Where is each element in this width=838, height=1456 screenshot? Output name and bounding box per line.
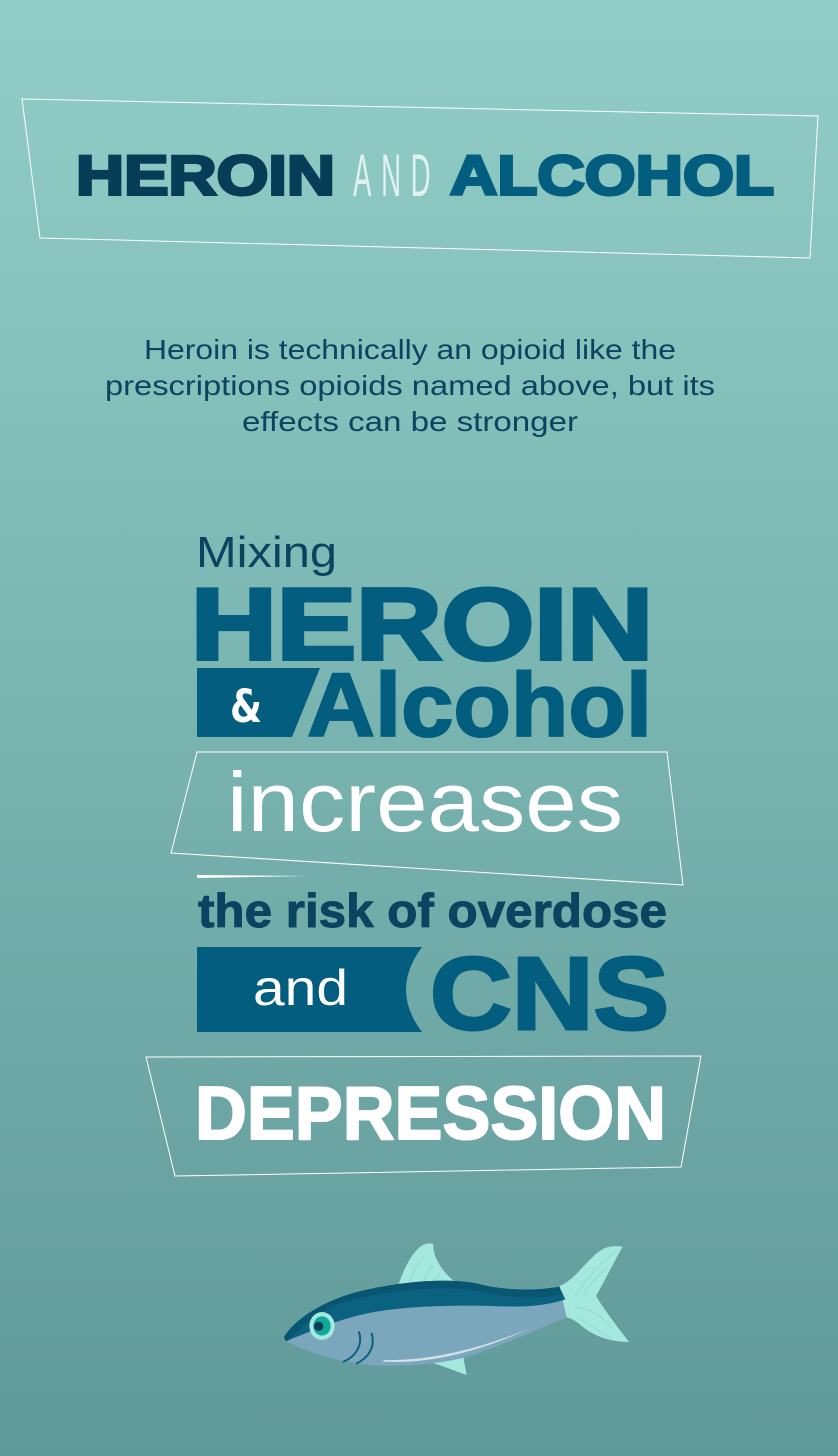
fish eye [309,1312,335,1340]
text: mixing: Mixing [196,528,337,577]
belly highlight [383,1329,528,1362]
title frame [22,99,818,258]
text: the risk of overdose: the risk of overdose [198,884,667,937]
text: cns: CNS [430,936,669,1051]
increases panel: increases [227,755,623,849]
title panel [22,99,818,258]
headline block [146,528,701,1176]
and badge: and [253,960,348,1016]
depression panel: DEPRESSION [195,1071,666,1155]
title word: alcohol: ALCOHOL [450,144,774,206]
intro paragraph: prescriptions opioids named above, but its [105,370,715,401]
fish body [284,1281,567,1366]
title word: and: AND [353,142,440,209]
gills [343,1331,373,1364]
ampersand badge: & [230,680,262,733]
ampersand badge [197,668,320,737]
dorsal fin [398,1243,457,1285]
icon: fish [284,1243,629,1375]
and badge [197,947,422,1032]
intro paragraph [105,334,715,437]
tail fin [559,1246,629,1342]
increases panel [171,752,683,885]
pelvic fin [428,1355,467,1375]
text: heroin: HEROIN [191,569,653,681]
text: alcohol: Alcohol [307,656,652,756]
upper back shade [284,1281,562,1341]
depression panel [146,1056,701,1176]
intro paragraph: effects can be stronger [242,406,578,437]
intro paragraph: Heroin is technically an opioid like the [144,334,676,365]
body stripe [284,1281,565,1341]
title word: heroin: HEROIN [76,144,335,206]
